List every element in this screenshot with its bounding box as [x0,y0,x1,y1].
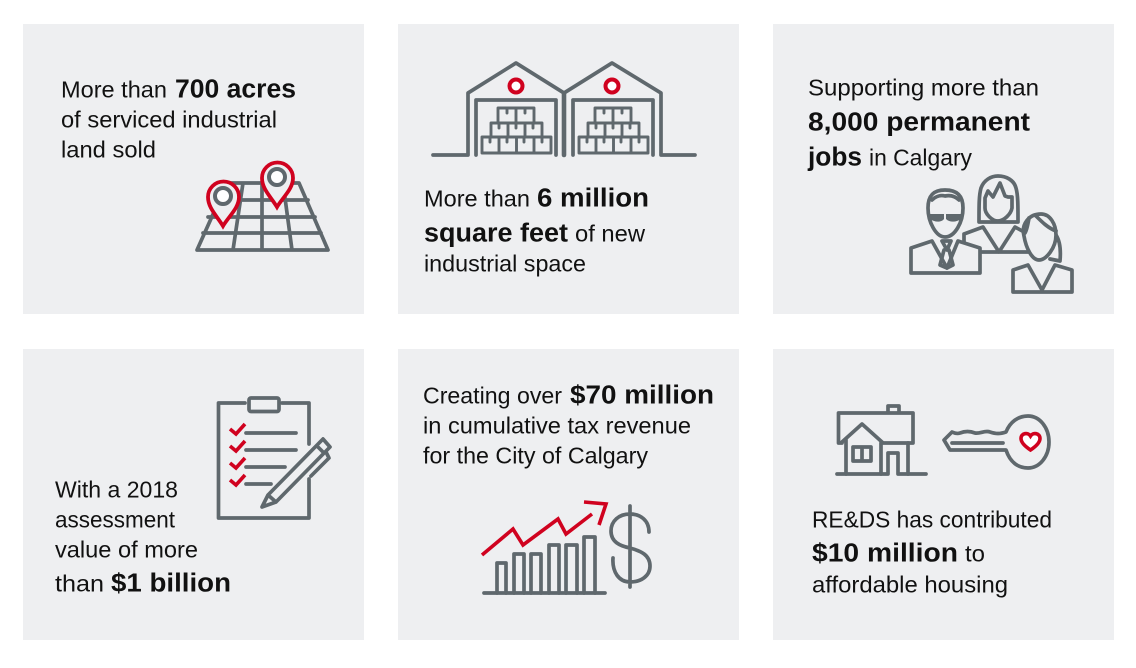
boxes: right stack [579,108,648,153]
text: 6 million square feet: More than [424,186,530,212]
text: 8,000 jobs: Supporting more than [808,74,1039,100]
text: 8,000 jobs [807,74,1039,172]
icon: map with pins [197,162,328,250]
arrow: trend line [482,502,606,555]
text: 700 acres: of serviced industrial [61,106,277,132]
text: tax revenue: $70 million [570,382,714,410]
panel: $10 million affordable housing [773,349,1114,640]
text: affordable housing: RE&DS has contributed [812,506,1052,532]
icon: warehouses [433,63,695,155]
panel: 700 acres [23,24,364,314]
panel: $70 million tax revenue [398,349,739,640]
text: affordable housing: $10 million [812,540,958,568]
text: 700 acres: land sold [61,136,156,162]
text: assessment value: value of more [55,536,198,562]
text: affordable housing [812,506,1052,598]
text: affordable housing: to [965,540,985,566]
text: 6 million square feet: 6 million [537,184,649,212]
text: assessment value [55,476,231,598]
icon: three people [911,176,1072,292]
text: assessment value: $1 billion [111,570,231,598]
icon: clipboard and pen [218,398,330,518]
text: tax revenue: in cumulative tax revenue [423,412,691,438]
boxes: left stack [482,108,551,153]
text: 6 million square feet: square feet [424,220,569,248]
text: 700 acres [61,76,296,162]
text: 8,000 jobs: jobs [807,144,862,172]
icon: growth chart and dollar sign [482,502,650,593]
text: 700 acres: 700 acres [175,76,296,104]
text: 8,000 jobs: 8,000 permanent [808,108,1031,136]
text: affordable housing: affordable housing [812,572,1008,598]
text: assessment value: assessment [55,506,176,532]
panel: 6 million square feet [398,24,739,314]
text: 700 acres: More than [61,76,167,102]
text: tax revenue: Creating over [423,382,562,408]
person: man with glasses [911,190,980,273]
text: assessment value: With a 2018 [55,476,178,502]
icon: house [837,406,926,474]
panel: $1 billion assessment [23,349,364,640]
panel: 8,000 jobs [773,24,1114,314]
text: 6 million square feet: industrial space [424,250,586,276]
icon: key with heart [944,416,1049,468]
text: tax revenue [423,382,714,468]
text: 6 million square feet [424,184,649,276]
person: woman behind [964,176,1030,252]
text: tax revenue: for the City of Calgary [423,442,649,468]
text: 6 million square feet: of new [575,220,645,246]
icon: dollar sign [611,506,650,587]
text: 8,000 jobs: in Calgary [869,144,972,170]
bar chart [484,537,605,593]
text: assessment value: than [55,570,104,596]
person: woman in front [1013,214,1072,292]
